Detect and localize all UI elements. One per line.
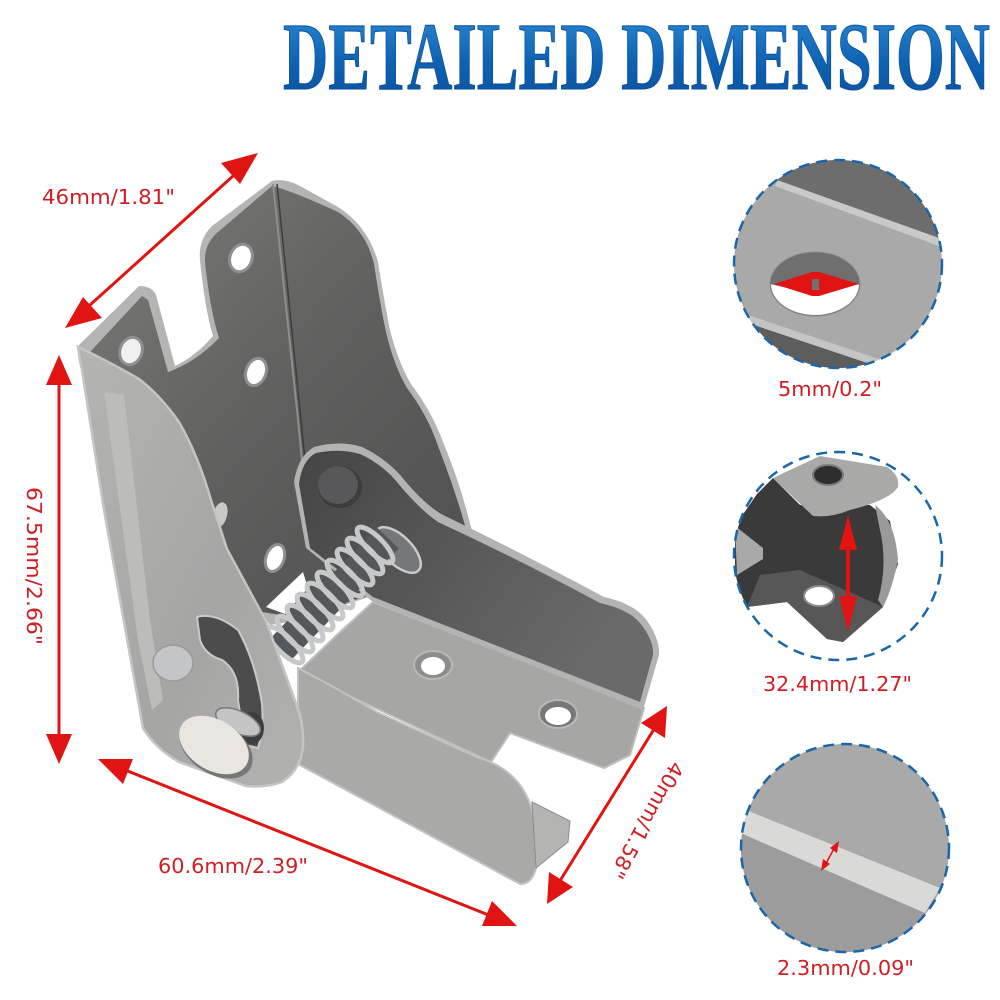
mounting holes [116,241,288,574]
red arrow [839,515,857,632]
dashed outline [734,452,942,660]
label: 67.5mm: 67.5mm/2.66" [22,487,46,645]
bend line [273,184,303,470]
red arrow [774,272,859,296]
dashed outline [734,160,942,368]
arrow: height 67.5mm [46,355,72,764]
label: 5mm: 5mm/0.2" [778,377,882,401]
dark rivet [318,466,362,508]
screw head [168,704,264,791]
white gap [266,572,308,614]
dashed outline [741,744,949,952]
bracket back plate [78,180,480,625]
slot [197,616,262,748]
front plate [78,347,303,786]
screw shank [212,702,264,744]
arrow: width 46mm [65,153,258,328]
red arrow [821,841,839,871]
label: 60.6mm: 60.6mm/2.39" [158,854,308,878]
product photo: folding bracket [78,180,659,884]
upper dark arm [294,444,659,710]
spring [262,520,428,668]
lower tab [532,802,570,868]
label: 40mm: 40mm/1.58" [605,758,689,883]
arrow: length 60.6mm [98,759,517,926]
lower arm outer face [298,668,536,884]
label: 46mm: 46mm/1.81" [42,185,175,209]
base plate [298,602,644,768]
detail circle: tab height [730,448,950,668]
detail circle: hole diameter [732,158,944,370]
label: 32.4mm: 32.4mm/1.27" [763,672,912,696]
detail circle: thickness [735,740,955,960]
rivet [153,645,193,681]
base holes [414,651,577,728]
label: 2.3mm: 2.3mm/0.09" [777,956,914,980]
arrow: depth 40mm [547,706,667,904]
light streak [104,392,163,710]
